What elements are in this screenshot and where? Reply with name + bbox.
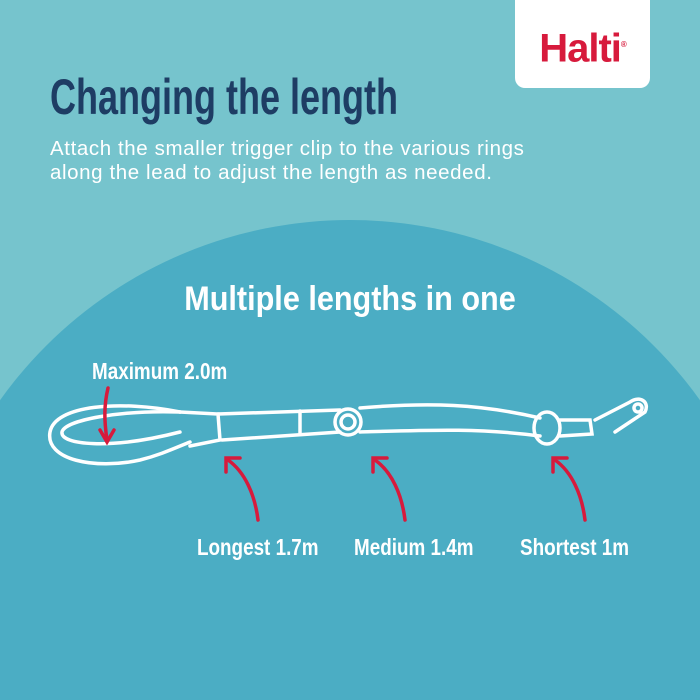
label: longest: Longest 1.7m bbox=[197, 534, 319, 560]
label: medium: Medium 1.4m bbox=[354, 534, 473, 560]
description bbox=[50, 137, 524, 184]
lead bbox=[50, 399, 646, 464]
description: along the lead to adjust the length as needed. bbox=[50, 161, 492, 184]
description: Attach the smaller trigger clip to the various rings bbox=[50, 137, 524, 160]
logo bbox=[515, 0, 650, 88]
background circle bbox=[0, 220, 700, 700]
label: shortest: Shortest 1m bbox=[520, 534, 629, 560]
title: Changing the length bbox=[50, 69, 398, 125]
subtitle: Multiple lengths in one bbox=[184, 280, 516, 318]
arrows bbox=[100, 388, 585, 520]
logo: Halti® bbox=[539, 26, 626, 70]
label: maximum: Maximum 2.0m bbox=[92, 358, 227, 384]
